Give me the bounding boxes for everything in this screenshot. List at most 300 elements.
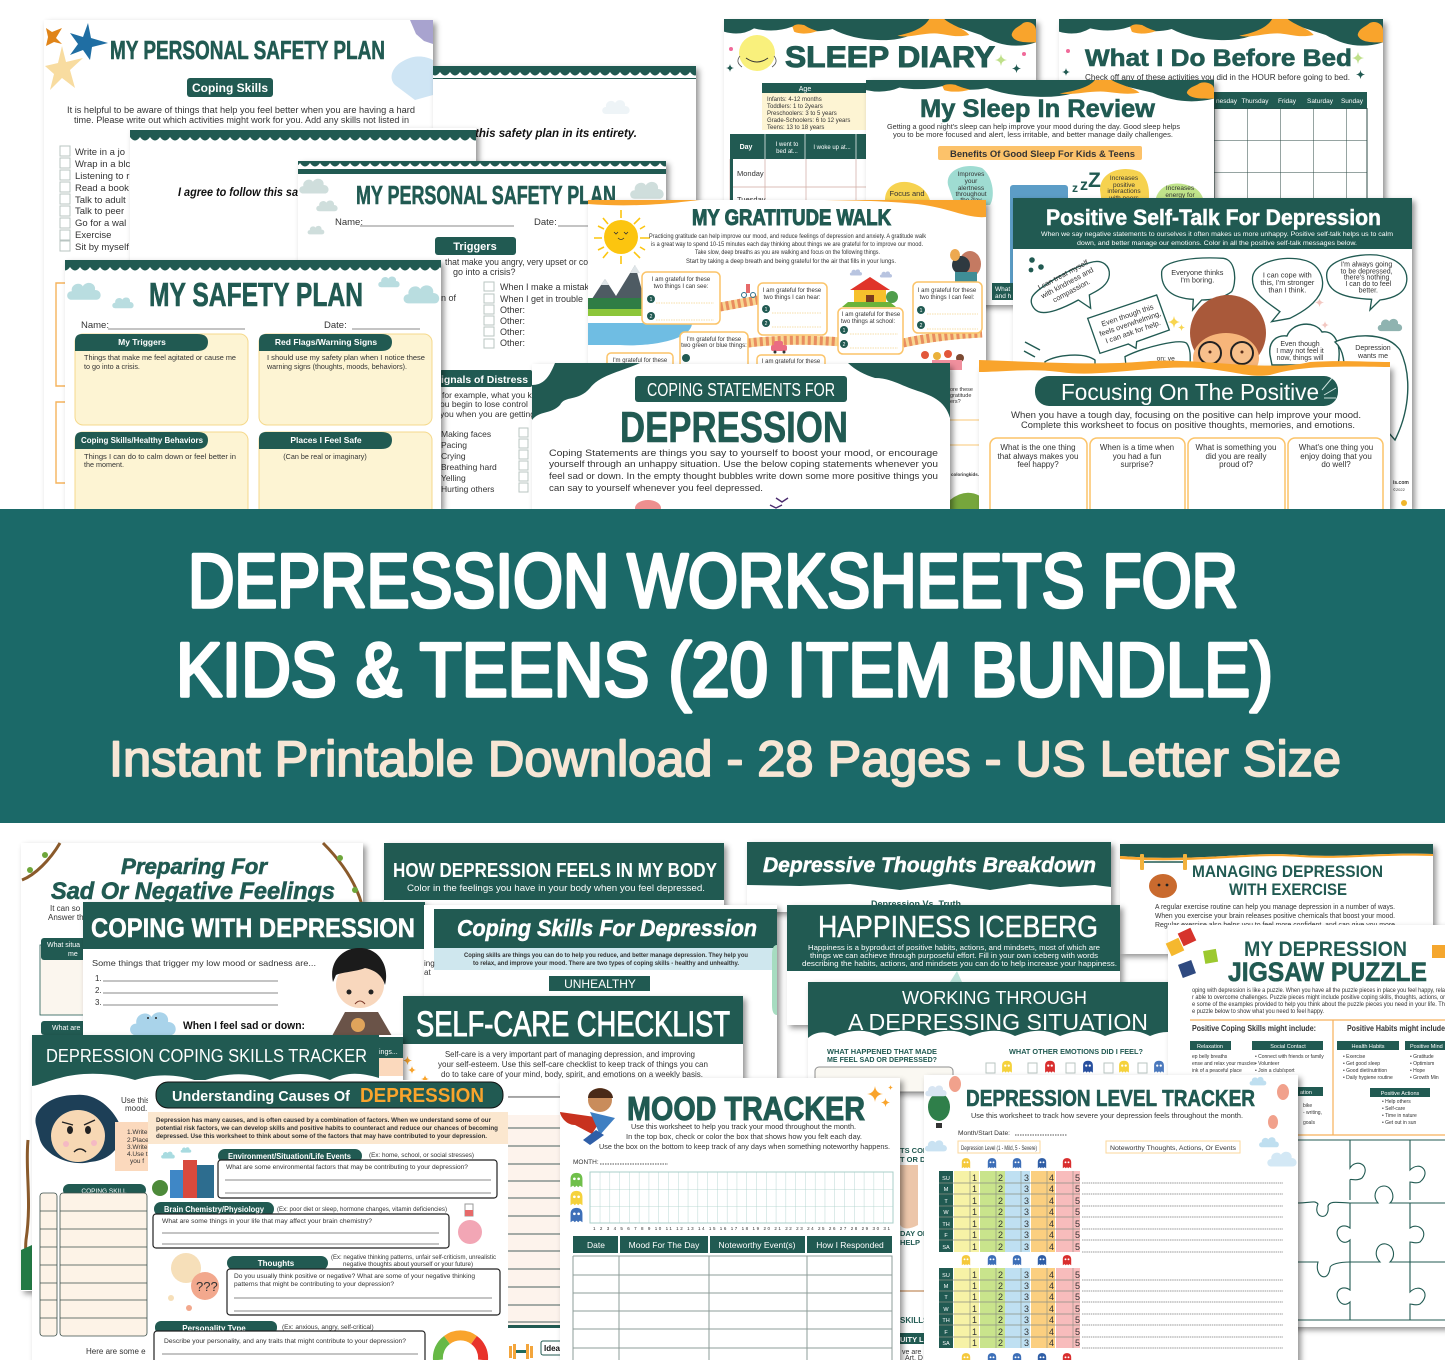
section: personality type: (Ex: anxious, angry, self-critical) [282, 1324, 374, 1331]
title pill: Focusing On The Positive [1061, 379, 1319, 405]
intro text: Take slow, deep breaths as you are walking and focus on the following things. [695, 249, 880, 256]
title: DEPRESSION LEVEL TRACKER [966, 1085, 1255, 1111]
instructions: 2.Place [127, 1137, 149, 1144]
fragment: underlying worksheet between trackers: DAY OF [900, 1229, 928, 1238]
question box 1: What is the one thing [1000, 443, 1076, 452]
fragment: underlying worksheet between trackers: TS CON [900, 1146, 928, 1155]
icon: city buildings [152, 1147, 214, 1198]
right tab [379, 1037, 403, 1076]
level grid week 1: 12345 [972, 1230, 1080, 1240]
worksheet: safety plan agreement middle page: I agree to follow this sa [178, 185, 298, 199]
fragment: underlying worksheet between trackers: T OR D [900, 1155, 926, 1164]
emotion checkboxes [986, 1061, 1164, 1073]
fragment: underlying worksheet between trackers: HELP [900, 1238, 920, 1247]
tracker table [40, 1193, 147, 1336]
question box 4: enjoy doing that you [1300, 452, 1372, 461]
instructions: Use this [121, 1096, 150, 1105]
icon: dumbbell [509, 1344, 533, 1359]
checklist [60, 146, 131, 253]
title: SELF-CARE CHECKLIST [416, 1005, 730, 1044]
level grid week 1: 12345 [972, 1184, 1080, 1194]
tab: social contact: ist/counselor [1262, 1075, 1290, 1081]
date field [958, 1130, 1067, 1137]
banner title line 1: DEPRESSION WORKSHEETS FOR [188, 539, 1238, 624]
intro text: It is helpful to be aware of things that help you feel better when you are having a hard [67, 105, 415, 115]
intro text: Answer th [48, 913, 84, 922]
fragment: underlying worksheet between trackers [895, 1135, 930, 1360]
level grid week 1 [939, 1171, 1080, 1252]
intro text: Happiness is a byproduct of positive habits, actions, and mindsets, most of which are [808, 943, 1100, 952]
title: MOOD TRACKER [627, 1090, 865, 1127]
instructions: 4.Use t [127, 1151, 148, 1158]
level grid week 2: 12345 [972, 1304, 1080, 1314]
level grid week 2: M [944, 1284, 949, 1290]
age table [762, 83, 866, 131]
question box 4 [1288, 438, 1383, 523]
worksheet: depressive thoughts breakdown [747, 842, 1111, 912]
name and date fields: Name: [335, 217, 363, 228]
speech box: overwhelming: Even though this [1100, 302, 1155, 329]
question box 3 [1188, 438, 1285, 523]
heading: signals of distress: ignals of Distress [441, 374, 528, 386]
wavy header [866, 80, 1214, 101]
column heading left: Positive Coping Skills might include: [1192, 1024, 1316, 1033]
icon: thought clouds [168, 1253, 219, 1311]
question box 1: feel happy? [1017, 460, 1059, 469]
partial bubbles behind boy: on; ve [1157, 356, 1175, 363]
instructions: mood. [125, 1104, 147, 1113]
subtitle: When we say negative statements to ourselves it often makes us more unhappy. Positive self-talk helps us to calm [1041, 231, 1393, 238]
trigger list: 3. [95, 998, 102, 1007]
title: My Sleep In Review [920, 95, 1156, 123]
speech bubble: always depressed: I can do to feel [1345, 281, 1392, 288]
title: COPING WITH DEPRESSION [91, 913, 415, 943]
speech bubble: always depressed: better. [1359, 287, 1378, 294]
level grid week 1: SA [942, 1245, 950, 1251]
puzzle [1298, 1140, 1445, 1320]
monster icons row 2 [962, 1255, 1071, 1265]
title: Positive Self-Talk For Depression [1046, 205, 1381, 230]
intro text: things we can achieve through purposeful effort. Fill in your own iceberg with words [810, 951, 1098, 960]
question box 3: proud of? [1219, 460, 1253, 469]
tab: organization: ation [1300, 1090, 1312, 1096]
sparkles and stars [1168, 298, 1329, 331]
intro text: Coping Statements are things you say to yourself to boost your mood, or encourage [549, 448, 938, 459]
clouds [67, 276, 439, 308]
level grid week 2 [939, 1268, 1080, 1348]
gratitude box: hear: 1 [765, 307, 768, 313]
question box 2: you had a fun [1113, 452, 1161, 461]
tab: social contact: • Connect with friends or family [1255, 1054, 1324, 1060]
weekly checklist table [1214, 92, 1367, 208]
mood grid [590, 1172, 893, 1223]
left fragment: ing [424, 959, 435, 968]
gratitude box: feel: two things I can feel: [920, 295, 975, 301]
prompt right: WHAT OTHER EMOTIONS DID I FEEL? [1009, 1047, 1143, 1056]
speech box: overwhelming [1088, 295, 1169, 353]
icons: bottom fragments [635, 498, 788, 516]
diary table: Day [740, 144, 753, 151]
trigger list: 1. [95, 974, 102, 983]
trigger list: Some things that trigger my low mood or sadness are... [92, 958, 316, 968]
tab: relaxation [1190, 1041, 1256, 1074]
title [51, 854, 335, 905]
bottom tab: What [995, 286, 1010, 293]
distress checklist: Hurting others [441, 484, 494, 494]
heading pill: coping skills: Coping Skills [192, 81, 268, 95]
checklist: Talk to adult [75, 195, 126, 206]
trigger checklist: When I get in trouble [500, 294, 583, 304]
level grid week 2: W [943, 1307, 949, 1313]
title pill [635, 376, 847, 402]
question box: What situa [47, 942, 80, 949]
worksheet: coping skills for depression [424, 905, 777, 1080]
speech bubble: cope [1252, 258, 1323, 322]
vines [22, 843, 362, 1285]
checklist: Wrap in a blc [75, 159, 131, 170]
tab: positive mindset: • Growth Min [1410, 1075, 1439, 1081]
fragment below gratitude walk: ore these [950, 387, 973, 393]
tab: positive mindset: • Optimism [1410, 1061, 1434, 1067]
level grid week 1: 12345 [972, 1196, 1080, 1206]
intro text: Practicing gratitude can help improve our mood, and reduce feelings of depression and anxiety. A gratitude walk [649, 233, 927, 240]
blue band text [434, 948, 777, 970]
worksheet: personal safety plan coping skills [44, 20, 433, 510]
box: places i feel safe [259, 432, 432, 522]
level grid week 1: 12345 [972, 1207, 1080, 1217]
name and date fields: Name: [81, 320, 109, 331]
diary table [730, 134, 866, 205]
worksheet: my gratitude walk [588, 200, 986, 380]
subheading: Depression Vs. Truth [871, 899, 961, 909]
section: thoughts: negative thoughts about yourself or your future) [343, 1262, 473, 1268]
name and date fields: Date: [534, 217, 557, 228]
intro text: describing the habits, actions, and mindsets you can do to help increase your happiness. [802, 959, 1117, 968]
box: coping skills: Things I can do to calm down or feel better in [84, 452, 236, 461]
banner title line 2: KIDS & TEENS (20 ITEM BUNDLE) [176, 628, 1273, 713]
green corner [21, 1245, 32, 1290]
speech bubble: boring: Everyone thinks [1171, 268, 1224, 277]
title: WITH EXERCISE [1229, 880, 1347, 899]
big title: DEPRESSION [620, 403, 848, 452]
benefit blobs: the day [960, 197, 982, 204]
question box 1: that always makes you [998, 452, 1078, 461]
banner subtitle: Instant Printable Download - 28 Pages - US Letter Size [109, 731, 1341, 787]
intro text [802, 943, 1117, 968]
name and date fields [81, 320, 420, 331]
icon: sleeping zzz with pillow [1010, 169, 1101, 295]
coping skill header [63, 1184, 146, 1196]
icon: sleeping zzz with pillow: z [1080, 177, 1088, 194]
sparkles [726, 47, 1026, 73]
worksheet: coping statements for depression [532, 363, 950, 516]
fragment: underlying worksheet between trackers: UITY L [900, 1335, 924, 1344]
title: SLEEP DIARY [785, 41, 995, 74]
date field: Month/Start Date: [958, 1130, 1010, 1137]
intro text [1192, 988, 1445, 1015]
icon: thought clouds: ??? [196, 1279, 218, 1294]
fragment: underlying worksheet between trackers: SKILLS [900, 1316, 929, 1325]
question box 4: do well? [1321, 460, 1351, 469]
peach intro band: potential risk factors, we can develop skills and positive habits to counteract and reduce our chances of becoming [156, 1125, 498, 1132]
trigger checklist: Other: [500, 327, 525, 337]
fragment below gratitude walk: ers? [950, 399, 961, 405]
orange frame [1190, 1020, 1445, 1135]
gratitude box: hear: I am grateful for these [763, 288, 822, 294]
instructions: you f [130, 1158, 144, 1165]
speech bubble: always depressed: there's nothing [1344, 275, 1390, 282]
tab: positive mindset [1405, 1041, 1445, 1081]
checklist: Exercise [75, 230, 111, 241]
level grid week 1: 12345 [972, 1173, 1080, 1183]
diary table: I woke up at... [813, 145, 851, 151]
distress checklist [441, 428, 528, 494]
box: places i feel safe: Places I Feel Safe [290, 435, 362, 445]
gratitude box: feel: I am grateful for these [918, 288, 977, 294]
icon: puzzle pieces [1166, 928, 1445, 978]
benefit blobs: Increases [1110, 175, 1139, 182]
intro text: It can so [50, 904, 81, 913]
benefit blobs: your [965, 178, 978, 185]
road [720, 300, 982, 343]
gratitude box: partial right: I am grateful for these [762, 359, 821, 365]
monster icons row 3 [962, 1353, 1071, 1360]
title: HOW DEPRESSION FEELS IN MY BODY [393, 860, 718, 882]
tab: positive mindset: Positive Mind [1410, 1044, 1443, 1050]
icon: mood gauge [438, 1335, 483, 1360]
worksheet: sleep diary [724, 19, 1036, 220]
intro text: Start by taking a deep breath and being grateful for the air that fills in your lungs. [686, 258, 896, 265]
gratitude box: see: I am grateful for these [652, 277, 711, 283]
intro text: you to be more focused and alert, less irritable, and better manage daily challenges. [893, 130, 1173, 139]
title [1228, 938, 1427, 987]
icon: moon [738, 35, 776, 71]
monster icons row 1 [962, 1158, 1071, 1168]
illustration: boy with glasses [1190, 295, 1266, 383]
checklist: Listening to r [75, 171, 129, 182]
left fragment: at [424, 968, 431, 977]
question box 4: What's one thing you [1299, 443, 1373, 452]
gratitude box: school [838, 308, 903, 354]
trigger checklist [484, 282, 594, 348]
title: DEPRESSION COPING SKILLS TRACKER [46, 1046, 367, 1066]
intro text: Getting a good night's sleep can help improve your mood during the day. Good sleep helps [887, 122, 1180, 131]
question box 2 [1090, 438, 1185, 523]
section: environment [218, 1149, 497, 1198]
benefit blobs: throughout [955, 191, 987, 198]
intro text [649, 233, 927, 265]
wavy header [1059, 19, 1383, 46]
sparkles [403, 1056, 429, 1083]
trigger list [92, 958, 316, 1007]
section: thoughts: (Ex: negative thinking patterns, unfair self-criticism, unrealistic [331, 1255, 496, 1261]
trigger list: 2. [95, 986, 102, 995]
level grid week 2: 12345 [972, 1315, 1080, 1325]
illustration: sad boy [332, 948, 392, 1040]
triggers text [441, 257, 588, 303]
level grid week 1: F [944, 1233, 948, 1239]
notes lines week 2 [1082, 1280, 1283, 1348]
level grid week 1: M [944, 1187, 949, 1193]
question box 2: surprise? [1121, 460, 1154, 469]
checklist: Sit by myself [75, 242, 129, 253]
table header: Noteworthy Event(s) [718, 1240, 796, 1250]
intro text: yourself through an unhappy situation. Use the below coping statements whenever you [549, 459, 938, 470]
intro text [1011, 410, 1361, 431]
title: MY DEPRESSION [1244, 938, 1407, 961]
worksheet: safety plan agreement middle page [130, 128, 476, 268]
worksheet: my safety plan [56, 260, 441, 522]
thought bubble: things will [1270, 324, 1339, 365]
speech box: overwhelming: feels overwhelming, [1098, 309, 1162, 338]
box: coping skills: the moment. [84, 460, 124, 469]
benefit blobs: Focus and [889, 189, 925, 198]
table header: Mood For The Day [629, 1240, 700, 1250]
sparkles [1062, 49, 1365, 79]
gratitude box: partial right [757, 355, 825, 375]
tab: organization: goals [1303, 1120, 1315, 1126]
title: MY SAFETY PLAN [149, 276, 363, 313]
diary table: Monday [737, 169, 764, 178]
level grid week 1: W [943, 1210, 949, 1216]
illustration: mountains and lake [588, 265, 692, 345]
balloons and clouds [925, 1076, 1297, 1167]
orange brackets [56, 283, 65, 483]
section: environment: What are some environmental factors that may be contributing to your depression? [226, 1164, 468, 1171]
speech bubble: boring [1162, 258, 1235, 310]
title: What I Do Before Bed [1085, 45, 1352, 72]
tab: health habits: • Daily hygiene routine [1343, 1075, 1393, 1081]
gratitude box: feel [913, 282, 982, 333]
gratitude box: school: two things at school: [841, 319, 896, 325]
weekly checklist table: Friday [1278, 98, 1297, 105]
age table: Preschoolers: 3 to 5 years [767, 111, 837, 117]
input box [815, 1067, 953, 1092]
tab: positive actions [1370, 1088, 1430, 1126]
gratitude box: see: 2 [650, 314, 653, 320]
section: thoughts: Do you usually think positive or negative? What are some of your negative thinking [234, 1273, 475, 1280]
gratitude box: hear [758, 283, 827, 335]
gratitude box: green or blue [680, 332, 748, 373]
worksheet: my sleep in review [866, 80, 1214, 305]
coping skill header: COPING SKILL [81, 1188, 127, 1195]
tab: relaxation: ink of a peaceful place [1192, 1068, 1242, 1074]
gratitude box: school: I am grateful for these [842, 312, 901, 318]
instructions: 3.Write [127, 1144, 148, 1151]
box: my triggers: My Triggers [118, 337, 166, 347]
speech bubble: depression wants me [1335, 336, 1408, 440]
intro text [1155, 904, 1395, 929]
question box 3: did you are really [1206, 452, 1266, 461]
level grid week 2: TH [942, 1318, 950, 1324]
worksheet: self-care checklist [403, 996, 743, 1096]
gratitude box: hear: 2 [765, 321, 768, 327]
level grid week 2: 12345 [972, 1270, 1080, 1280]
intro text: is a great way to spend 10-15 minutes each day thinking about things we are grateful for to improve our mood. [651, 241, 923, 248]
tab: social contact: • Volunteer [1255, 1061, 1280, 1067]
fragment: lined page behind causes worksheet [500, 1098, 571, 1360]
box: red flags: warning signs (thoughts, moods, behaviors). [266, 362, 407, 371]
section: brain chemistry: What are some things in your life that may affect your brain chemistry? [162, 1218, 372, 1225]
benefit blobs: Increases [1166, 185, 1195, 192]
section: personality type: Personality Type [182, 1324, 246, 1333]
icon: cyclist [742, 284, 756, 298]
tab: organization [1298, 1087, 1323, 1126]
header [1013, 198, 1412, 249]
title: MY PERSONAL SAFETY PLAN [356, 180, 616, 210]
intro text [549, 448, 938, 494]
level grid week 1: T [944, 1199, 948, 1205]
tab: positive mindset: • Gratitude [1410, 1054, 1434, 1060]
intro text: When you exercise your brain releases positive chemicals that boost your mood. [1155, 913, 1395, 920]
level grid week 2: SU [942, 1273, 950, 1279]
worksheet: understanding causes of depression [148, 1080, 508, 1360]
prompt left: WHAT HAPPENED THAT MADE [827, 1047, 937, 1056]
subtitle: Color in the feelings you have in your body when you feel depressed. [407, 883, 705, 893]
gratitude box: feel: 1 [920, 308, 923, 314]
fragment below gratitude walk: coloringkids.com [951, 472, 988, 477]
right tab: ings... [379, 1049, 398, 1056]
intro text: your self-esteem. Use this self-care checklist to keep track of things you can [438, 1059, 708, 1069]
worksheet: how depression feels in my body [384, 843, 724, 913]
benefit blobs: alertness [958, 185, 985, 192]
sparkles [867, 1085, 893, 1107]
icon: grey cloud [1378, 319, 1402, 331]
tab: positive actions: • Get out in sun [1382, 1120, 1416, 1126]
age table: Grade-Schoolers: 6 to 12 years [767, 118, 850, 124]
thought bubble: things will: Even though [1280, 341, 1320, 348]
peach intro band [148, 1112, 508, 1144]
tab: social contact: Social Contact [1270, 1044, 1306, 1050]
gratitude box: partial [607, 353, 673, 373]
speech bubble: depression wants me: wants me [1357, 353, 1388, 360]
question box 2: What are [52, 1025, 81, 1032]
age table: Age [799, 86, 811, 93]
gratitude box: see: two things I can see: [654, 284, 709, 290]
tab: positive actions: • Time in nature [1382, 1113, 1417, 1119]
icon: starfish group [45, 23, 108, 90]
left fragment [424, 959, 435, 977]
benefit blobs: positive [1113, 182, 1135, 189]
icon: barbell [1140, 854, 1187, 870]
worksheet: happiness iceberg [787, 905, 1120, 1025]
footer fragment [1393, 480, 1409, 506]
box: red flags: Red Flags/Warning Signs [275, 337, 377, 347]
benefit blobs: energy for [1165, 192, 1195, 199]
tab: health habits: Health Habits [1351, 1044, 1385, 1050]
illustration: superhero kid [560, 1088, 615, 1145]
intro text [438, 1049, 708, 1079]
worksheet: mood tracker [560, 1078, 900, 1360]
title pill [156, 1082, 503, 1108]
speech bubble: kindness: I can treat myself [1036, 257, 1091, 292]
intro text: feel sad or down. In the empty thought bubbles write down some more positive things you [549, 471, 938, 482]
section: brain chemistry: Brain Chemistry/Physiology [164, 1205, 265, 1214]
blue band text: to relax, and improve your mood. There are two types of coping skills - healthy and unhealthy. [473, 961, 739, 967]
gratitude box: partial: I'm grateful for these [613, 358, 668, 364]
tab: social contact: • Join a club/sport [1255, 1068, 1295, 1074]
gratitude box: green or blue: two green or blue things: [681, 343, 747, 349]
illustration: frowning face [35, 1095, 121, 1163]
speech bubble: depression wants me: Depression [1355, 345, 1391, 352]
orange wave header [979, 360, 1390, 376]
box: my triggers: to go into a crisis. [84, 362, 140, 371]
worksheet: what i do before bed [1059, 19, 1383, 220]
icon: brain lifting [1149, 874, 1177, 898]
table header: Date [587, 1240, 605, 1250]
worksheet: my depression jigsaw puzzle [1166, 925, 1445, 1327]
ideas label [541, 1341, 571, 1355]
